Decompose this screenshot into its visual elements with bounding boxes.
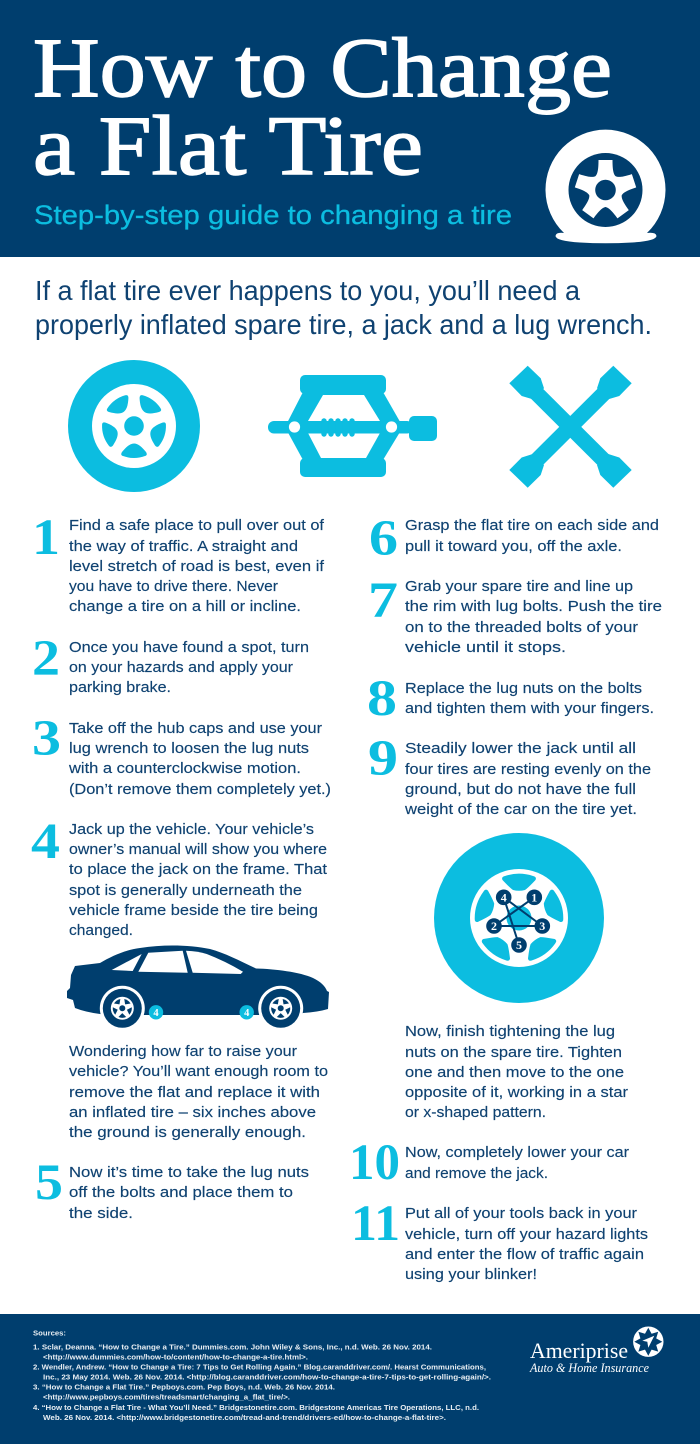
step 5 text: the side. xyxy=(69,1205,133,1222)
step numbers: 6 xyxy=(369,511,398,567)
sources: 2. Wendler, Andrew. “How to Change a Tire: 7 Tips to Get Rolling Again.” Blog.caranddriver.com/. Hearst Communications, xyxy=(33,1362,486,1372)
step 4 text: changed. xyxy=(69,922,133,939)
title: a Flat Tire xyxy=(33,99,423,193)
step 6 text xyxy=(405,517,659,555)
step 4 text: vehicle frame beside the tire being xyxy=(69,902,318,919)
sources: <http://www.dummies.com/how-to/content/how-to-change-a-tire.html>. xyxy=(43,1352,308,1362)
step 10 text xyxy=(405,1144,629,1182)
icon: car with jack points: 4 xyxy=(153,1008,159,1019)
title xyxy=(33,21,612,193)
step 7 text: on to the threaded bolts of your xyxy=(405,619,638,636)
step numbers: 7 xyxy=(368,573,398,629)
icon: spare tire xyxy=(68,360,200,492)
subtitle: Step-by-step guide to changing a tire xyxy=(34,200,512,230)
step 4 follow-up text: an inflated tire – six inches above xyxy=(69,1104,316,1121)
step 4 follow-up text: remove the flat and replace it with xyxy=(69,1084,320,1101)
step 5 text xyxy=(69,1164,309,1222)
step 9 follow-up text: opposite of it, working in a star xyxy=(405,1084,628,1101)
step 2 text xyxy=(69,639,309,696)
step 8 text: Replace the lug nuts on the bolts xyxy=(405,680,642,697)
icon: car with jack points: 4 xyxy=(244,1008,250,1019)
step 5 text: Now it’s time to take the lug nuts xyxy=(69,1164,309,1181)
icon: tire with star tightening pattern xyxy=(434,833,604,1003)
step 11 text xyxy=(405,1205,648,1283)
icon: lug wrench xyxy=(509,366,632,488)
step numbers xyxy=(31,510,400,1252)
sources: <http://www.pepboys.com/tires/treadsmart/changing_a_flat_tire/>. xyxy=(43,1392,290,1402)
step 9 follow-up text: or x-shaped pattern. xyxy=(405,1104,546,1121)
step 4 follow-up text: vehicle? You’ll want enough room to xyxy=(69,1063,328,1080)
step 4 text xyxy=(69,821,328,939)
step 6 text: pull it toward you, off the axle. xyxy=(405,538,622,555)
logo: Ameriprise: Ameriprise xyxy=(530,1338,628,1363)
intro text: If a flat tire ever happens to you, you’ll need a xyxy=(35,275,581,306)
sources: Inc., 23 May 2014. Web. 26 Nov. 2014. <http://blog.caranddriver.com/how-to-change-a-tire-7-tips-to-get-rolling-again/>. xyxy=(43,1372,491,1382)
step 1 text: Find a safe place to pull over out of xyxy=(69,517,325,534)
step 1 text: level stretch of road is best, even if xyxy=(69,558,325,575)
icon: flat tire xyxy=(546,130,666,243)
step 9 follow-up text: one and then move to the one xyxy=(405,1064,624,1081)
step numbers: 3 xyxy=(32,711,61,767)
step 2 text: parking brake. xyxy=(69,679,171,696)
step 1 text: the way of traffic. A straight and xyxy=(69,538,298,555)
step 4 text: spot is generally underneath the xyxy=(69,882,302,899)
step numbers: 1 xyxy=(32,510,60,566)
step 8 text xyxy=(405,680,654,717)
sources: 3. “How to Change a Flat Tire.” Pepboys.com. Pep Boys, n.d. Web. 26 Nov. 2014. xyxy=(33,1382,335,1392)
step numbers: 5 xyxy=(35,1155,63,1211)
step 9 text: four tires are resting evenly on the xyxy=(405,761,651,778)
panel: header xyxy=(0,0,700,257)
step 3 text: with a counterclockwise motion. xyxy=(68,760,301,777)
step numbers: 9 xyxy=(368,731,398,787)
step 9 text: ground, but do not have the full xyxy=(405,781,636,798)
sources: Sources: xyxy=(33,1328,66,1338)
step 7 text: Grab your spare tire and line up xyxy=(405,578,633,595)
step numbers: 4 xyxy=(31,814,60,870)
step 2 text: Once you have found a spot, turn xyxy=(69,639,309,656)
icon: tire with star tightening pattern: 1 xyxy=(531,890,537,904)
step numbers: 8 xyxy=(367,671,397,727)
step 6 text: Grasp the flat tire on each side and xyxy=(405,517,659,534)
title: How to Change xyxy=(33,21,612,115)
step 4 follow-up text xyxy=(69,1043,328,1141)
step 3 text xyxy=(68,720,331,798)
intro text: properly inflated spare tire, a jack and a lug wrench. xyxy=(35,309,652,340)
sources: 1. Sclar, Deanna. “How to Change a Tire.” Dummies.com. John Wiley & Sons, Inc., n.d. Web. 26 Nov. 2014. xyxy=(33,1342,432,1352)
sources: 4. “How to Change a Flat Tire - What You’ll Need.” Bridgestonetire.com. Bridgestone Americas Tire Operations, LLC, n.d. xyxy=(33,1403,479,1412)
step 9 follow-up text xyxy=(405,1023,628,1121)
step 11 text: vehicle, turn off your hazard lights xyxy=(405,1226,648,1243)
step 7 text xyxy=(405,578,662,656)
step numbers: 11 xyxy=(351,1196,400,1252)
right column steps xyxy=(404,517,662,1283)
step 1 text: you have to drive there. Never xyxy=(69,578,278,595)
step 7 text: the rim with lug bolts. Push the tire xyxy=(405,598,662,615)
step numbers: 10 xyxy=(349,1135,400,1191)
step 9 text: Steadily lower the jack until all xyxy=(405,740,636,757)
sources: Web. 26 Nov. 2014. <http://www.bridgestonetire.com/tread-and-trend/drivers-ed/how-to-change-a-flat-tire>. xyxy=(43,1413,446,1422)
step 1 text: change a tire on a hill or incline. xyxy=(69,598,301,615)
intro text xyxy=(35,275,652,340)
step 11 text: Put all of your tools back in your xyxy=(405,1205,637,1222)
step 4 follow-up text: Wondering how far to raise your xyxy=(69,1043,297,1060)
icon: car with jack points xyxy=(67,945,329,1031)
step 1 text xyxy=(69,517,325,615)
step 4 text: owner’s manual will show you where xyxy=(69,841,327,858)
step 10 text: and remove the jack. xyxy=(405,1165,548,1182)
step 3 text: lug wrench to loosen the lug nuts xyxy=(69,740,309,757)
step 9 follow-up text: nuts on the spare tire. Tighten xyxy=(405,1044,622,1061)
step 4 text: Jack up the vehicle. Your vehicle’s xyxy=(69,821,314,838)
step 9 text xyxy=(404,740,651,818)
logo: Ameriprise: Auto & Home Insurance xyxy=(529,1360,649,1375)
step 7 text: vehicle until it stops. xyxy=(405,639,566,656)
step 5 text: off the bolts and place them to xyxy=(69,1184,293,1201)
step 4 follow-up text: the ground is generally enough. xyxy=(69,1124,306,1141)
icon: tire with star tightening pattern: 5 xyxy=(516,938,522,952)
icon: tire with star tightening pattern: 2 xyxy=(491,919,497,933)
step 3 text: Take off the hub caps and use your xyxy=(69,720,322,737)
left column steps xyxy=(68,517,331,1222)
step 3 text: (Don’t remove them completely yet.) xyxy=(69,781,331,798)
step 2 text: on your hazards and apply your xyxy=(69,659,293,676)
step 8 text: and tighten them with your fingers. xyxy=(405,700,654,717)
panel: footer xyxy=(0,1314,700,1444)
step numbers: 2 xyxy=(32,631,60,687)
icon: tire with star tightening pattern: 4 xyxy=(501,890,507,904)
step 11 text: and enter the flow of traffic again xyxy=(405,1246,644,1263)
icon: tire with star tightening pattern: 3 xyxy=(539,919,545,933)
step 11 text: using your blinker! xyxy=(405,1266,537,1283)
step 9 text: weight of the car on the tire yet. xyxy=(404,801,637,818)
icon: jack xyxy=(268,375,437,477)
step 9 follow-up text: Now, finish tightening the lug xyxy=(405,1023,615,1040)
step 10 text: Now, completely lower your car xyxy=(405,1144,629,1161)
logo: Ameriprise xyxy=(529,1326,664,1375)
step 4 text: to place the jack on the frame. That xyxy=(69,861,328,878)
sources xyxy=(33,1328,491,1422)
